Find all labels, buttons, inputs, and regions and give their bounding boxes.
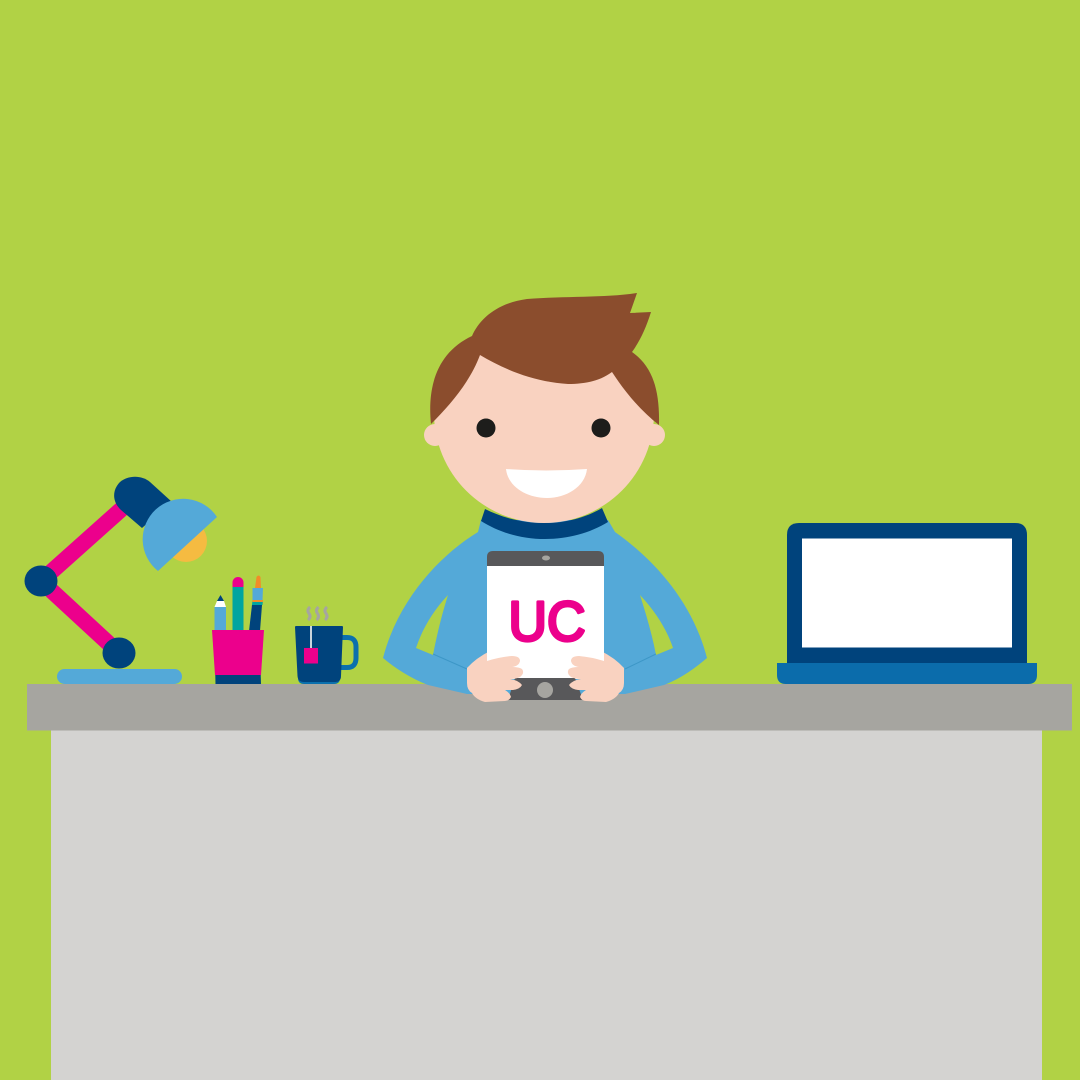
character — [383, 293, 707, 702]
ears — [424, 424, 665, 446]
lamp joints — [24, 566, 136, 668]
mug base — [298, 678, 340, 684]
lamp base — [57, 669, 182, 684]
teal pen — [232, 577, 244, 631]
lamp head — [114, 477, 172, 528]
tablet screen — [487, 566, 604, 679]
blue pencil — [214, 595, 226, 631]
icon: laptop — [777, 523, 1037, 684]
laptop lid — [787, 523, 1027, 663]
lamp bulb — [165, 520, 207, 562]
tablet lower bezel — [508, 678, 583, 700]
desk body — [51, 730, 1042, 1080]
UC logo: UC — [508, 590, 586, 652]
tea bag string — [310, 626, 312, 648]
pot band — [215, 675, 261, 684]
paintbrush — [249, 576, 263, 631]
pot — [212, 630, 264, 675]
tea bag tag — [304, 648, 318, 664]
tablet — [487, 551, 604, 700]
arm creases — [433, 654, 656, 669]
sweater — [383, 520, 707, 694]
steam — [308, 607, 327, 620]
icon: pencil pot — [212, 576, 264, 684]
tablet button — [537, 682, 553, 698]
eyes — [476, 418, 610, 438]
mug body — [295, 626, 343, 682]
desk top — [27, 684, 1072, 730]
face — [434, 345, 654, 523]
gap left of body — [416, 595, 448, 655]
laptop base — [777, 663, 1037, 684]
desk — [27, 684, 1072, 1080]
icon: desk lamp — [24, 477, 217, 684]
left hand — [467, 656, 523, 702]
lamp arms — [41, 497, 135, 653]
gap right of body — [640, 595, 673, 655]
hand backs behind tablet — [467, 651, 624, 670]
collar — [481, 508, 608, 539]
mug handle — [340, 638, 356, 668]
lamp shade — [143, 499, 217, 571]
tablet header — [487, 551, 604, 566]
right hand — [568, 656, 624, 702]
hair — [430, 293, 659, 425]
smile — [506, 469, 587, 498]
laptop screen — [802, 538, 1012, 648]
tablet camera — [542, 556, 550, 560]
icon: mug of tea — [295, 607, 356, 684]
